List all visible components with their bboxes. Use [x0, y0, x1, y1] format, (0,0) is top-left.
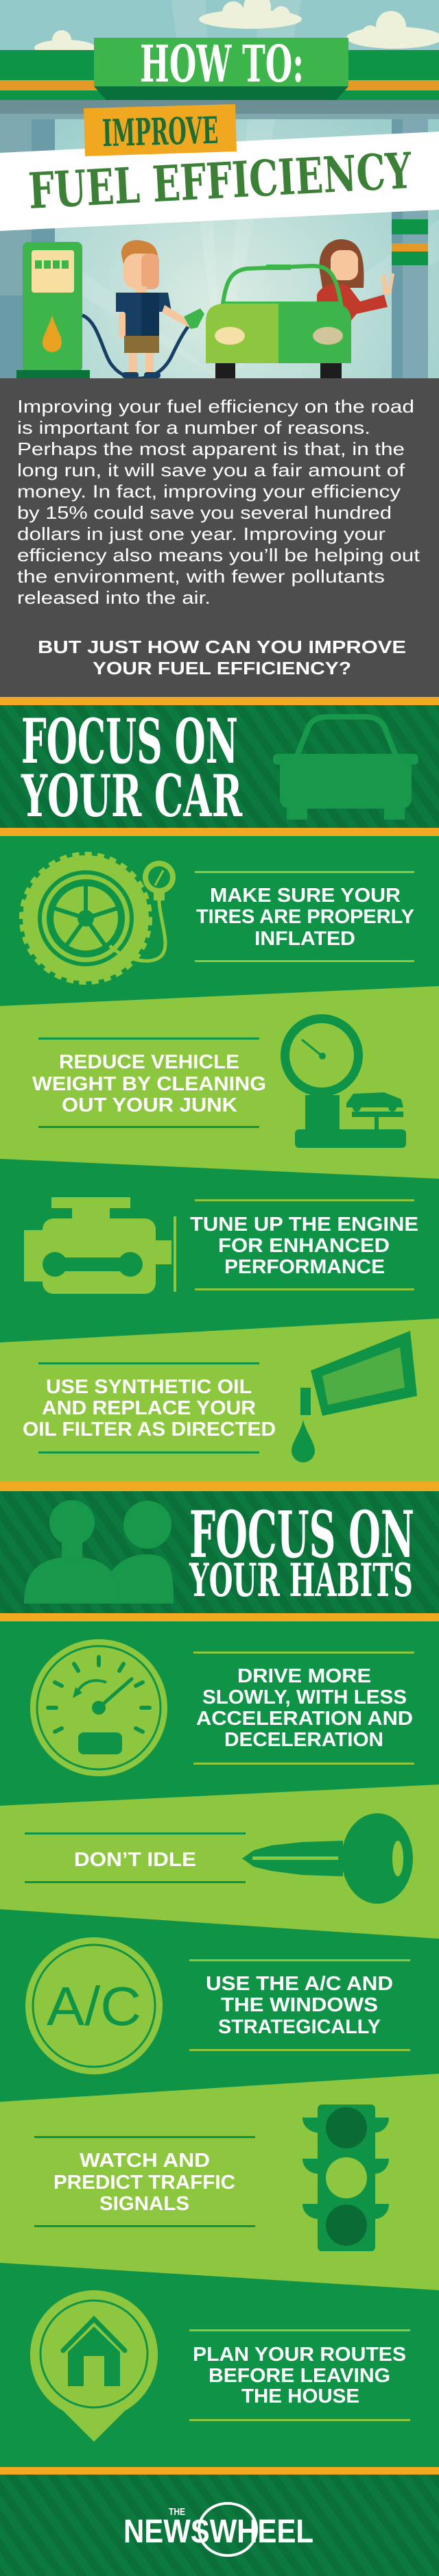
- intro text panel: by 15% could save you several hundred: [17, 502, 392, 523]
- intro text panel: Improving your fuel efficiency on the road: [17, 396, 414, 417]
- panel: vehicle weight: OUT YOUR JUNK: [62, 1094, 237, 1116]
- logo: the newswheel: [123, 2503, 313, 2555]
- section header: focus on your car: [0, 697, 439, 836]
- icon: home pin: [30, 2290, 158, 2442]
- panel: drive slowly: ACCELERATION AND: [196, 1708, 413, 1730]
- hose: [82, 315, 192, 378]
- panel: plan routes: THE HOUSE: [241, 2385, 359, 2407]
- question heading: [38, 637, 406, 678]
- icon: scale with car: [281, 1014, 406, 1148]
- icon: A/C circle: [25, 1937, 163, 2074]
- icon: tire with gauge: [23, 855, 176, 981]
- footer with logo: [0, 2467, 439, 2576]
- panel: traffic signals: [34, 2105, 389, 2251]
- panel: plan routes: BEFORE LEAVING: [209, 2365, 390, 2387]
- icon: key: [242, 1813, 413, 1904]
- panel: drive slowly: DECELERATION: [224, 1729, 383, 1751]
- car: [223, 266, 341, 304]
- icon: people: [24, 1500, 174, 1604]
- panel: drive slowly: [30, 1639, 414, 1776]
- title: improve fuel efficiency: [0, 104, 439, 231]
- icon: A/C circle: A/C: [47, 1976, 141, 2037]
- intro text panel: the environment, with fewer pollutants: [17, 566, 385, 587]
- clouds: [34, 0, 439, 56]
- panel: A/C: [25, 1937, 410, 2074]
- intro text panel: efficiency also means you’ll be helping out: [17, 545, 420, 565]
- panel: drive slowly: SLOWLY, WITH LESS: [202, 1686, 407, 1708]
- section header: focus on your habits: [0, 1482, 439, 1621]
- title: improve fuel efficiency: IMPROVE: [102, 108, 219, 155]
- panel: don't idle: DON’T IDLE: [74, 1849, 196, 1871]
- intro text panel: is important for a number of reasons.: [17, 417, 370, 438]
- intro text panel: Perhaps the most apparent is that, in the: [17, 439, 405, 459]
- icon: engine with wrench: [24, 1197, 176, 1294]
- panel: engine: TUNE UP THE ENGINE: [190, 1214, 418, 1236]
- panel: tires: TIRES ARE PROPERLY: [196, 906, 414, 928]
- icon: car front: [273, 717, 418, 820]
- panel: don't idle: [25, 1813, 413, 1904]
- man: [121, 240, 158, 264]
- title sign: HOW TO: [94, 35, 348, 100]
- panel: A/C: THE WINDOWS: [221, 1994, 378, 2016]
- panel: traffic signals: PREDICT TRAFFIC: [54, 2172, 235, 2194]
- panel: plan routes: [30, 2290, 410, 2442]
- woman: [320, 239, 364, 288]
- panel: traffic signals: WATCH AND: [80, 2150, 210, 2172]
- panel: A/C: USE THE A/C AND: [206, 1973, 393, 1995]
- panel: vehicle weight: [32, 1014, 406, 1148]
- canopy: [0, 50, 439, 80]
- panel: A/C: STRATEGICALLY: [218, 2016, 381, 2038]
- title sign: HOW TO: HOW TO:: [140, 35, 304, 94]
- icon: speedometer: [30, 1639, 167, 1776]
- panel: synthetic oil: [23, 1331, 417, 1462]
- panel: vehicle weight: WEIGHT BY CLEANING: [32, 1073, 266, 1095]
- panel: traffic signals: SIGNALS: [99, 2193, 189, 2215]
- question heading: YOUR FUEL EFFICIENCY?: [93, 658, 351, 678]
- pump: [23, 242, 82, 372]
- habits panel backgrounds: [0, 1621, 439, 2467]
- intro text panel: released into the air.: [17, 587, 211, 608]
- intro text panel: money. In fact, improving your efficiency: [17, 481, 401, 502]
- panel: engine: [24, 1197, 418, 1294]
- logo: the newswheel: THE: [169, 2506, 185, 2518]
- panel: plan routes: PLAN YOUR ROUTES: [193, 2344, 406, 2366]
- columns: [0, 119, 32, 378]
- panel: synthetic oil: AND REPLACE YOUR: [42, 1397, 256, 1419]
- question heading: BUT JUST HOW CAN YOU IMPROVE: [38, 637, 406, 657]
- panel: tires: INFLATED: [254, 928, 355, 950]
- hero illustration: [0, 0, 439, 378]
- icon: traffic light: [302, 2105, 389, 2251]
- panel: drive slowly: DRIVE MORE: [237, 1665, 371, 1687]
- intro text panel: long run, it will save you a fair amount of: [17, 460, 405, 480]
- panel: tires: MAKE SURE YOUR: [210, 885, 401, 907]
- panel: tires: [23, 855, 414, 981]
- panel: engine: FOR ENHANCED: [218, 1235, 390, 1257]
- section header: focus on your car: FOCUS ON: [21, 705, 238, 778]
- intro text panel: [0, 378, 439, 697]
- panel: synthetic oil: USE SYNTHETIC OIL: [46, 1376, 252, 1398]
- logo: the newswheel: NEWSWHEEL: [123, 2514, 313, 2550]
- habits panels backgrounds (car section): [0, 836, 439, 1482]
- icon: oil can: [292, 1331, 417, 1462]
- panel: synthetic oil: OIL FILTER AS DIRECTED: [23, 1419, 276, 1440]
- section header: focus on your car: YOUR CAR: [21, 762, 243, 830]
- panel: engine: PERFORMANCE: [224, 1256, 385, 1278]
- intro text panel: dollars in just one year. Improving your: [17, 524, 385, 544]
- panel: vehicle weight: REDUCE VEHICLE: [59, 1051, 239, 1073]
